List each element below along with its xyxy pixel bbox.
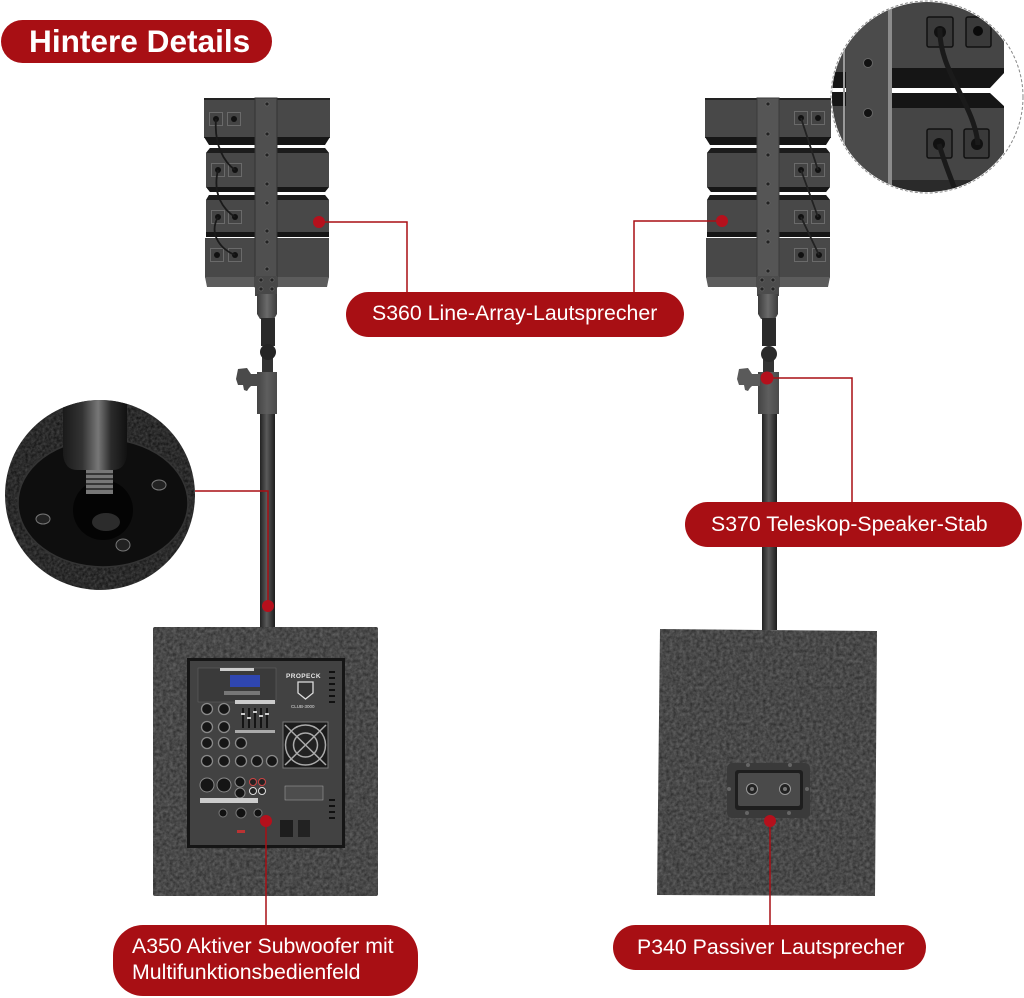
power socket and switch (280, 820, 310, 837)
brand: PROPECK (286, 673, 321, 680)
output jacks (219, 808, 262, 833)
brand: CLUB-3000 (291, 704, 315, 709)
label: A350: A350 Aktiver Subwoofer mit (132, 934, 394, 958)
connector ports and cables (210, 112, 242, 262)
left line-array speakers (204, 98, 330, 296)
handle (727, 763, 810, 818)
channel strip (200, 798, 258, 803)
connector ports and cables (794, 112, 826, 262)
fan (283, 722, 328, 768)
bracket (757, 98, 779, 296)
leader: passive speaker (764, 815, 776, 926)
label: P340: P340 Passiver Lautsprecher (637, 935, 905, 959)
equalizer (235, 700, 275, 733)
warning label (285, 786, 323, 800)
leader: line-array left (313, 216, 407, 293)
left stand pole (236, 294, 277, 628)
detail circle: cabling close-up (831, 0, 1023, 194)
mixer knobs (202, 704, 278, 766)
label: A350: Multifunktionsbedienfeld (132, 960, 360, 984)
brand (286, 673, 321, 709)
leader: line-array right (634, 215, 728, 293)
label: S370: S370 Teleskop-Speaker-Stab (711, 512, 988, 536)
bracket bolts (864, 58, 872, 118)
close-up ports (927, 17, 991, 158)
title: Hintere Details (29, 23, 250, 59)
right stand pole (737, 294, 779, 630)
leader: telescopic pole (760, 372, 852, 503)
label: S370 (685, 502, 1022, 547)
title (1, 20, 272, 63)
leader: pole mount (195, 491, 274, 612)
label: P340 (613, 925, 926, 970)
label: A350 (113, 925, 418, 996)
close-up cables (939, 28, 978, 190)
label: S360: S360 Line-Array-Lautsprecher (372, 301, 657, 325)
mount screws (36, 480, 166, 551)
right line-array speakers (705, 98, 831, 296)
passive subwoofer P340 (657, 629, 877, 896)
bracket (255, 98, 277, 296)
vents (329, 672, 335, 818)
control panel (187, 658, 345, 848)
label: S360 (346, 292, 684, 337)
XLR inputs and RCA (200, 777, 266, 798)
active subwoofer A350 (153, 627, 378, 896)
detail circle: pole mount close-up (5, 400, 195, 590)
leader: active subwoofer (260, 815, 272, 926)
media player (198, 668, 276, 702)
